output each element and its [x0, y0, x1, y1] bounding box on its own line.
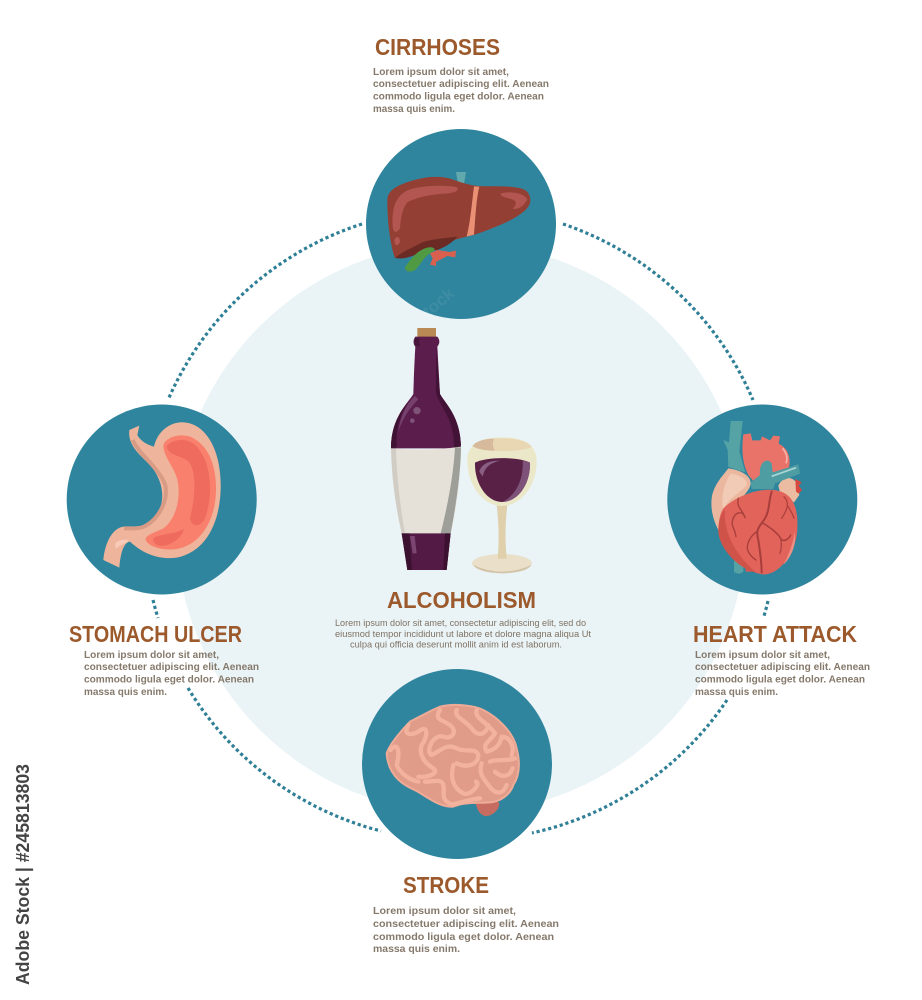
text block: cirrhoses: commodo ligula eget dolor. Aenean [373, 90, 544, 102]
text block: stroke: Lorem ipsum dolor sit amet, [373, 905, 516, 917]
text block: stomach ulcer: commodo ligula eget dolor. Aenean [84, 674, 254, 686]
heading: alcoholism: ALCOHOLISM [387, 587, 536, 613]
text block: cirrhoses: massa quis enim. [373, 103, 455, 115]
teal circle: stroke [362, 669, 552, 859]
teal circle: cirrhoses [366, 129, 556, 319]
icon: stomach [103, 422, 221, 568]
text block: stomach ulcer [84, 649, 259, 698]
text block: alcoholism: eiusmod tempor incididunt ut labore et dolore magna aliqua Ut [335, 629, 591, 640]
panel: heart attack [667, 404, 870, 698]
icon: heart [711, 421, 802, 574]
text block: cirrhoses: consectetuer adipiscing elit. Aenean [373, 78, 549, 90]
icon: wine bottle [391, 328, 461, 570]
watermark: Stock [410, 283, 458, 328]
pale background circle [176, 243, 746, 813]
panel: cirrhoses [366, 34, 556, 328]
text block: cirrhoses [373, 66, 549, 115]
text block: heart attack: massa quis enim. [695, 686, 778, 698]
text block: stomach ulcer: massa quis enim. [84, 686, 167, 698]
heading: stroke: STROKE [403, 872, 489, 898]
text block: stroke: commodo ligula eget dolor. Aenean [373, 931, 554, 943]
dotted ring connecting the conditions [153, 224, 768, 833]
text block: stroke: consectetuer adipiscing elit. Aenean [373, 918, 559, 930]
heading: stomach ulcer: STOMACH ULCER [69, 621, 242, 647]
panel: alcoholism [335, 328, 591, 650]
teal circle: heart attack [667, 404, 857, 594]
text block: stroke: massa quis enim. [373, 943, 460, 955]
text block: alcoholism: Lorem ipsum dolor sit amet, consectetur adipiscing elit, sed do [335, 618, 586, 629]
text block: stroke [373, 905, 559, 955]
heading: cirrhoses: CIRRHOSES [375, 34, 500, 60]
stock credit line: Adobe Stock | #245813803 [12, 764, 33, 985]
text block: cirrhoses: Lorem ipsum dolor sit amet, [373, 66, 509, 78]
icon: brain [387, 705, 519, 816]
text block: stomach ulcer: consectetuer adipiscing elit. Aenean [84, 661, 259, 673]
text block: alcoholism [335, 618, 591, 650]
text block: heart attack: commodo ligula eget dolor. Aenean [695, 674, 865, 686]
text block: alcoholism: culpa qui officia deserunt mollit anim id est laborum. [350, 640, 562, 650]
icon: liver [387, 172, 530, 271]
text block: heart attack: consectetuer adipiscing elit. Aenean [695, 661, 870, 673]
panel: stomach ulcer [67, 404, 259, 698]
teal circle: stomach ulcer [67, 404, 257, 594]
text block: stomach ulcer: Lorem ipsum dolor sit amet, [84, 649, 219, 661]
icon: wine glass [467, 437, 537, 573]
panel: stroke [362, 669, 559, 955]
text block: heart attack: Lorem ipsum dolor sit amet, [695, 649, 830, 661]
text block: heart attack [695, 649, 870, 698]
heading: heart attack: HEART ATTACK [693, 621, 857, 647]
